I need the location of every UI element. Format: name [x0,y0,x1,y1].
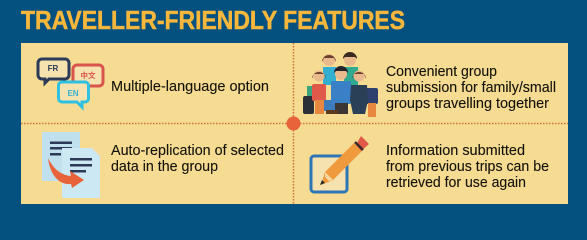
icon: pencil and checkbox [311,136,369,192]
text: auto replication: Auto-replication of selected [111,142,284,159]
centre dot [286,116,300,130]
text: retrieved information: retrieved for use again [386,174,526,191]
text: auto replication [111,142,284,175]
text: group submission: submission for family/small [386,79,556,96]
icon: language speech bubbles [38,59,103,107]
text: group submission: groups travelling together [386,95,549,112]
text: group submission: Convenient group [386,63,497,80]
text: retrieved information: Information submitted [386,142,525,159]
title: TRAVELLER-FRIENDLY FEATURES [21,5,405,35]
text: retrieved information: from previous trips can be [386,158,549,175]
icon: language speech bubbles: 中文 [80,70,96,80]
icon: duplicated documents [42,132,100,198]
text: auto replication: data in the group [111,158,218,175]
text: group submission [386,63,556,112]
icon: language speech bubbles: EN [67,89,79,98]
icon: language speech bubbles: FR [48,64,59,73]
panel: features [21,43,568,204]
text: multiple language: Multiple-language option [111,78,269,95]
text: retrieved information [386,142,549,191]
icon: group of travellers [303,52,378,117]
